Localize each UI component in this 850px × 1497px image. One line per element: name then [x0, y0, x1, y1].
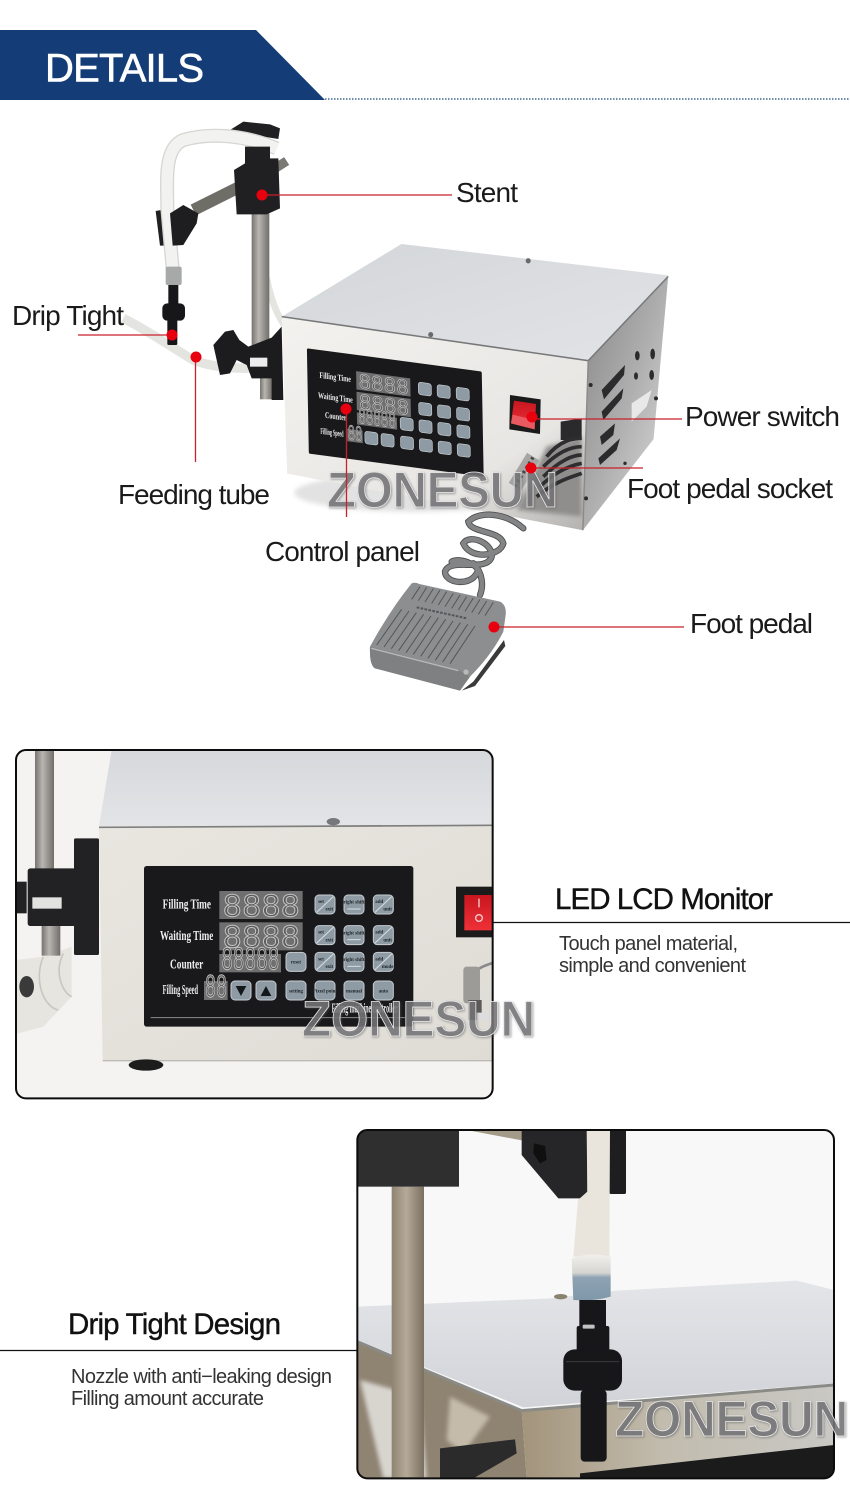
tube sleeve [166, 267, 182, 285]
callout: Power switch [526, 401, 840, 432]
callout: Control panel: Control panel [265, 536, 420, 567]
top plate [282, 244, 668, 361]
clamp [16, 838, 99, 955]
callout: Foot pedal socket [526, 462, 833, 504]
buttons: reset [291, 961, 301, 966]
watermark: machine photo: ZONESUN [327, 462, 558, 518]
machine cabinet [282, 244, 668, 530]
cabinet right side details [509, 349, 658, 517]
text block: Drip Tight Design: Drip Tight Design [68, 1308, 281, 1341]
buttons: manual [346, 989, 363, 994]
cabinet left reflection [357, 1342, 527, 1478]
buttons: add [375, 931, 384, 936]
callout: Foot pedal: Foot pedal [690, 608, 813, 639]
control panel on machine: Filling Speed [320, 426, 344, 439]
buttons: add [375, 957, 384, 962]
text block: Drip Tight Design: Nozzle with anti−leaking design [71, 1366, 332, 1388]
control panel on machine: Counter [325, 410, 347, 423]
power switch [509, 395, 541, 434]
tube sleeve [572, 1255, 611, 1300]
panel: LED LCD monitor photo: Filling Speed [163, 982, 198, 997]
callout: Foot pedal socket: Foot pedal socket [627, 473, 833, 504]
cabinet front plate [522, 1385, 834, 1478]
stand, clamps and nozzle [156, 122, 287, 400]
inner box [561, 418, 582, 440]
panel: LED LCD monitor photo: Counter [170, 957, 203, 972]
buttons: unit [383, 938, 392, 943]
nozzle [162, 285, 185, 345]
buttons [364, 375, 470, 458]
header banner [0, 30, 325, 100]
silicone tube [16, 947, 72, 1034]
screws [428, 332, 433, 337]
knob [440, 1439, 517, 1478]
buttons: right shift [343, 958, 365, 963]
front plate [282, 317, 588, 530]
stand rod [252, 213, 269, 347]
panel: LED LCD monitor photo: 8888 [223, 889, 300, 927]
rivet [554, 1294, 567, 1299]
cabinet top plate [357, 1281, 834, 1407]
text block: LED LCD Monitor: Touch panel material, [559, 933, 738, 955]
buttons: Fixed point [313, 989, 337, 994]
control panel on machine: 8888 [358, 370, 409, 402]
buttons: set [318, 957, 324, 962]
panel: LED LCD monitor photo: 8888 [223, 921, 300, 959]
heading: DETAILS: DETAILS [45, 46, 204, 90]
buttons: exit [325, 965, 334, 970]
control panel on machine: Waiting Time [318, 390, 353, 405]
side plate [583, 276, 668, 530]
back tube clamp [156, 210, 165, 246]
cabinet shadow [294, 474, 537, 512]
pedal base [462, 640, 505, 691]
pedal body [370, 583, 506, 691]
buttons: right shift [343, 901, 365, 906]
black panel corner [580, 1445, 834, 1478]
pedal ribs [377, 587, 493, 664]
callout: Drip Tight: Drip Tight [12, 300, 124, 331]
control panel on machine [307, 348, 484, 477]
row labels: Filling Time [319, 370, 351, 384]
callout: Feeding tube: Feeding tube [118, 479, 270, 510]
panel: LED LCD monitor photo: 88 [205, 970, 227, 1008]
gray pedal cable [445, 515, 523, 595]
LED displays [346, 370, 412, 450]
arm rod [193, 178, 257, 210]
callout: Feeding tube [118, 352, 270, 510]
buttons: setting [289, 989, 304, 994]
callout: Stent [256, 177, 518, 208]
callout: Foot pedal [488, 608, 813, 639]
LED displays [204, 891, 303, 1000]
callout: Drip Tight [12, 300, 178, 340]
silicone tube [167, 136, 277, 268]
panel: drip tight nozzle photo [357, 1130, 834, 1478]
buttons: exit [325, 938, 334, 943]
panel: LED LCD monitor photo: Filling machine controller [332, 1000, 398, 1015]
power switch [456, 887, 496, 937]
panel: LED LCD monitor photo: 88888 [221, 943, 279, 981]
stand clamp [357, 1130, 459, 1187]
row labels: Filling Time [163, 897, 211, 912]
text block: LED LCD Monitor [493, 883, 850, 977]
buttons: unit [383, 908, 392, 913]
buttons: mode [382, 965, 394, 970]
screen bezel [144, 866, 413, 1027]
stand rod [35, 750, 54, 873]
buttons [231, 895, 394, 1000]
socket reflection [517, 437, 582, 517]
buttons: add [375, 900, 384, 905]
text block: Drip Tight Design: Filling amount accurate [71, 1388, 264, 1410]
socket connector [515, 457, 533, 487]
control panel on machine: 8888 [359, 391, 409, 422]
callout: Stent: Stent [456, 177, 518, 208]
arm rod [472, 1131, 522, 1140]
control panel on machine: 88888 [358, 405, 396, 435]
lower clamp and knob [213, 327, 283, 400]
silicone tube [573, 1130, 610, 1257]
text block: Drip Tight Design [0, 1308, 357, 1410]
buttons: auto [379, 989, 389, 994]
text block: LED LCD Monitor: LED LCD Monitor [555, 883, 773, 916]
cable coil [537, 438, 582, 497]
stand rod [392, 1187, 424, 1478]
product photo: filling machine with pedal [123, 122, 668, 691]
nozzle [563, 1300, 622, 1462]
buttons: exit [325, 908, 334, 913]
callout: Power switch: Power switch [685, 401, 840, 432]
foot pedal [370, 583, 506, 691]
stand clamp [234, 147, 280, 214]
panel: LED LCD monitor photo: Waiting Time [160, 928, 213, 943]
panel: LED LCD monitor photo [16, 750, 496, 1098]
vent slots [584, 349, 658, 500]
buttons: set [318, 931, 324, 936]
front tube clamp [170, 205, 198, 246]
text block: LED LCD Monitor: simple and convenient [559, 955, 746, 977]
top knob [230, 122, 280, 139]
control panel on machine: 88 [348, 421, 362, 448]
cabinet foot [129, 1059, 163, 1071]
callout: Control panel [265, 404, 420, 567]
cabinet front [99, 825, 493, 1060]
watermark: monitor photo: ZONESUN [302, 991, 535, 1047]
tube clamp [522, 1130, 587, 1198]
buttons: right shift [343, 931, 365, 936]
cabinet top [99, 750, 493, 826]
buttons: set [318, 900, 324, 905]
feeding tube and rear tube [123, 278, 287, 368]
socket connector [478, 962, 492, 970]
